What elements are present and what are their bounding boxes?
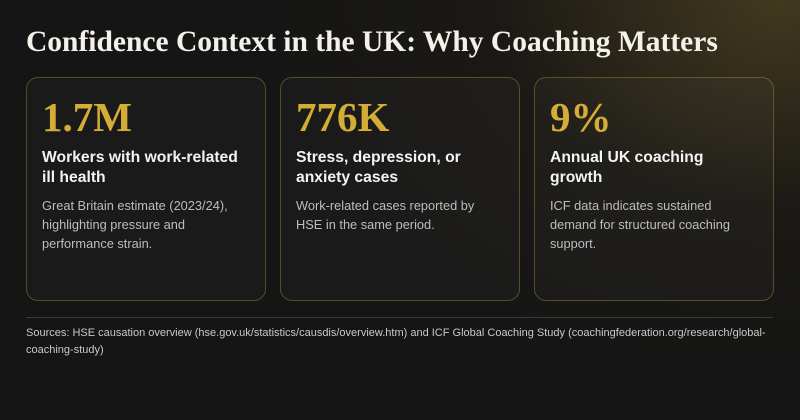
- stat number: 9%: [550, 94, 612, 140]
- card: workers ill health: [26, 77, 266, 301]
- card heading: Workers with work-related ill health: [42, 149, 238, 186]
- stat number: 1.7M: [42, 94, 132, 140]
- card heading: Annual UK coaching growth: [550, 149, 703, 186]
- card: coaching growth: [534, 77, 774, 301]
- stat number: 776K: [296, 94, 389, 140]
- title: Confidence Context in the UK: Why Coaching Matters: [26, 26, 718, 58]
- sources footnote: Sources: HSE causation overview (hse.gov.uk/statistics/causdis/overview.htm) and ICF Global Coaching Study (coachingfederation.org/research/global-coaching-study): [26, 327, 766, 356]
- card: stress cases: [280, 77, 520, 301]
- card description: ICF data indicates sustained demand for structured coaching support.: [550, 198, 730, 251]
- card description: Work-related cases reported by HSE in the same period.: [296, 198, 474, 232]
- card description: Great Britain estimate (2023/24), highlighting pressure and performance strain.: [42, 198, 228, 251]
- card heading: Stress, depression, or anxiety cases: [296, 149, 461, 186]
